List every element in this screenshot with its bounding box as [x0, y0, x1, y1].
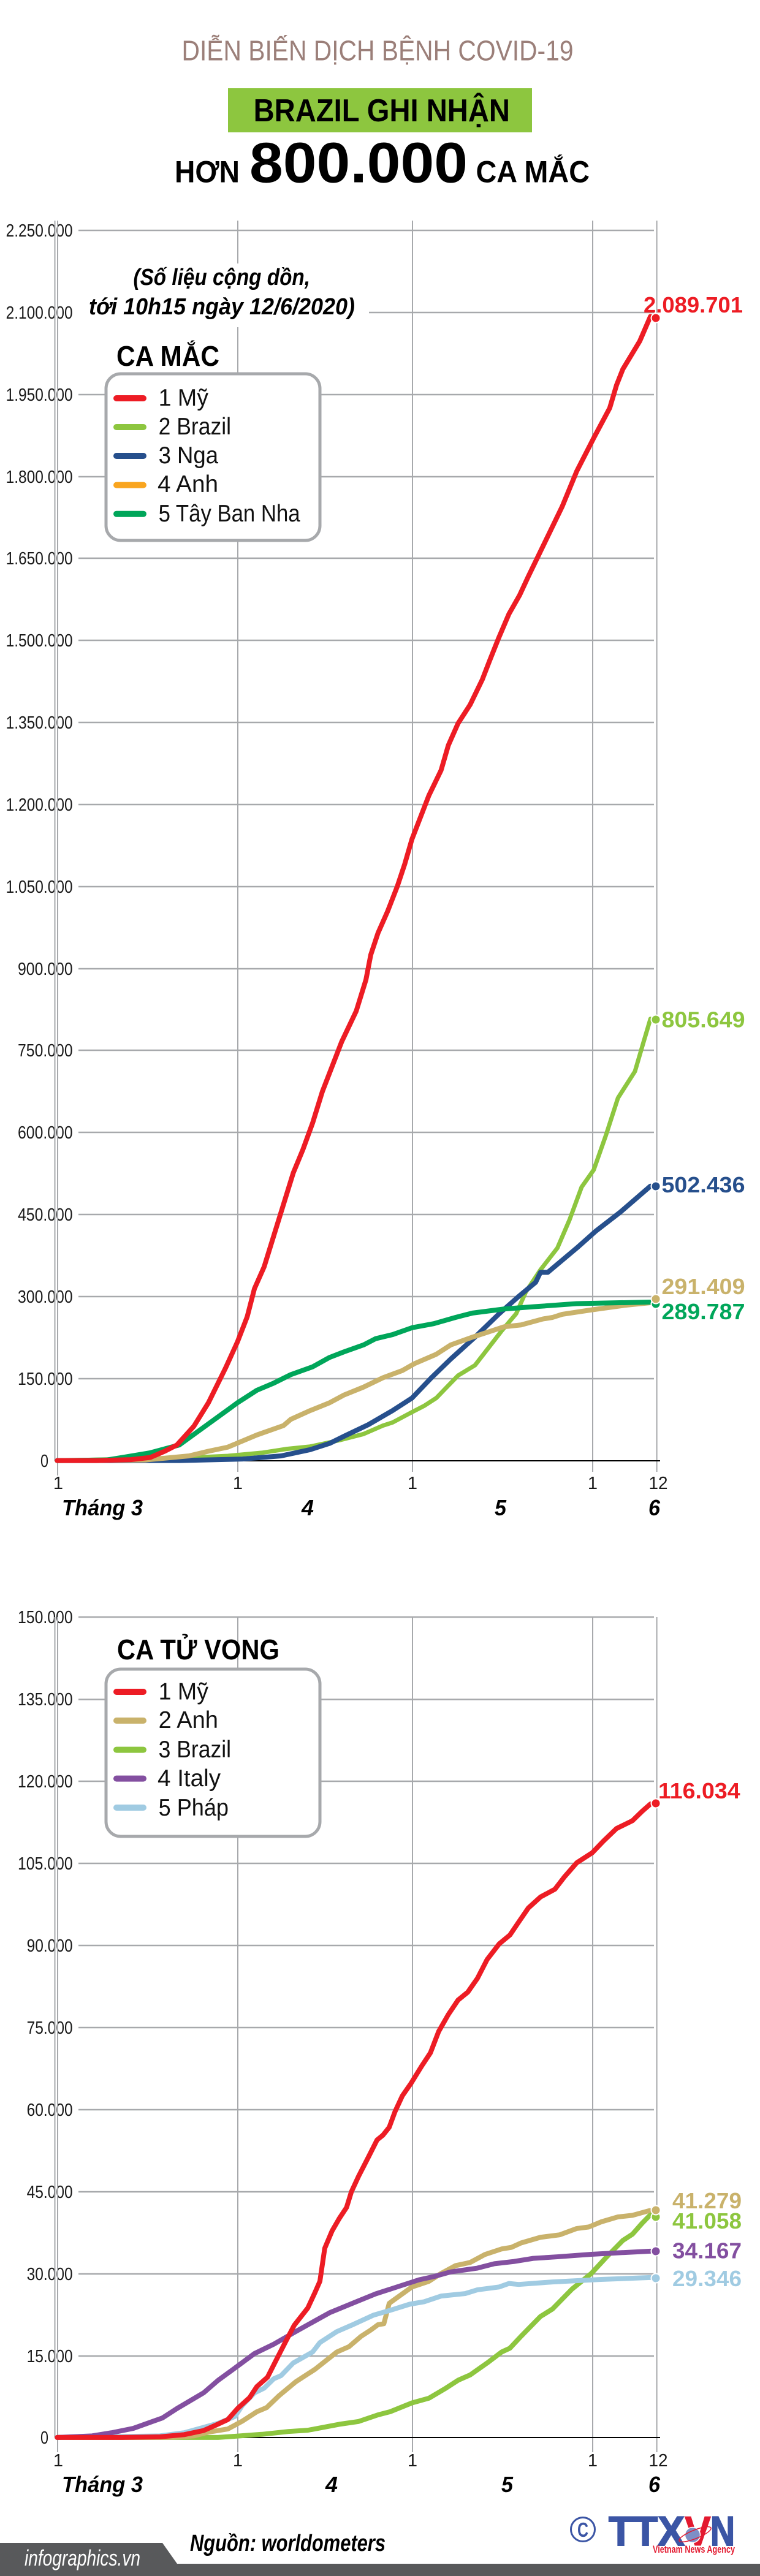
y axis labels: 1.200.000	[6, 795, 73, 815]
x axis labels: 1	[408, 2451, 417, 2471]
value labels	[644, 292, 745, 1324]
source: Nguồn: worldometers	[190, 2531, 386, 2556]
x axis labels: 5	[501, 2472, 514, 2497]
legend: ca tu vong: 4 Italy	[158, 1765, 221, 1792]
x axis labels: 1	[53, 2451, 63, 2471]
y axis labels: 1.050.000	[6, 877, 73, 897]
value labels: 29.346	[672, 2266, 742, 2291]
legend: ca mac: 3 Nga	[159, 442, 218, 469]
y axis labels: 45.000	[27, 2183, 73, 2202]
y axis labels: 300.000	[18, 1287, 73, 1307]
y axis labels: 15.000	[27, 2347, 73, 2366]
y axis labels: 0	[40, 1452, 48, 1471]
series: Nga	[57, 1186, 650, 1461]
headline figure: CA MẮC	[476, 154, 590, 189]
value labels: 2.089.701	[644, 292, 743, 317]
legend: ca mac: 2 Brazil	[159, 414, 231, 440]
y axis labels: 135.000	[18, 1690, 73, 1710]
logo: TTXVN: C	[577, 2518, 588, 2541]
value labels: 805.649	[662, 1007, 745, 1032]
x axis labels: 12	[648, 1474, 668, 1493]
x axis labels: 6	[648, 2472, 661, 2497]
series: My	[57, 316, 650, 1461]
y axis labels: 1.950.000	[6, 385, 73, 405]
series: Anh	[57, 1303, 650, 1461]
x axis labels: 6	[648, 1495, 661, 1520]
logo: TTXVN: N	[710, 2508, 735, 2555]
legend: ca mac: 4 Anh	[158, 471, 218, 498]
y axis labels: 900.000	[18, 960, 73, 979]
chart: ca tu vong	[18, 1608, 742, 2497]
value labels	[658, 1778, 742, 2291]
y axis labels: 1.650.000	[6, 549, 73, 569]
headline figure: HƠN	[175, 154, 240, 189]
value labels: 291.409	[662, 1274, 745, 1299]
y axis labels: 1.500.000	[6, 631, 73, 651]
y axis labels: 2.100.000	[6, 303, 73, 323]
legend: ca mac: 5 Tây Ban Nha	[159, 501, 300, 527]
y axis labels: 1.350.000	[6, 713, 73, 733]
note: tới 10h15 ngày 12/6/2020)	[89, 294, 355, 320]
series: Brazil deaths	[57, 2214, 650, 2438]
y axis labels: 30.000	[27, 2265, 73, 2284]
value labels: 34.167	[672, 2238, 742, 2263]
y axis labels: 90.000	[27, 1936, 73, 1956]
y axis labels: 105.000	[18, 1854, 73, 1874]
x axis labels: 1	[408, 1474, 417, 1493]
logo: TTXVN: TTX	[609, 2508, 685, 2555]
y axis labels	[18, 1608, 73, 2448]
legend: ca mac	[106, 374, 320, 540]
value labels: 289.787	[662, 1299, 745, 1324]
y axis labels: 75.000	[27, 2018, 73, 2038]
series: My deaths	[57, 1804, 650, 2438]
y axis labels: 600.000	[18, 1123, 73, 1143]
x axis labels: 1	[233, 1474, 243, 1493]
chart: ca mac	[6, 221, 745, 1520]
value labels: 116.034	[658, 1778, 740, 1803]
end dots	[651, 1799, 661, 2283]
legend: ca tu vong	[106, 1669, 320, 1836]
x axis labels	[53, 2451, 668, 2497]
footer bar: infographics.vn	[25, 2545, 140, 2570]
x axis labels: Tháng 3	[62, 1495, 143, 1520]
logo: TTXVN: V	[685, 2508, 711, 2555]
series: Tay Ban Nha	[57, 1302, 650, 1461]
note	[89, 265, 355, 320]
value labels: 502.436	[662, 1172, 745, 1197]
x axis labels: 4	[325, 2472, 338, 2497]
value labels: 41.058	[672, 2208, 742, 2233]
y axis labels: 120.000	[18, 1772, 73, 1792]
x axis labels: 12	[648, 2451, 668, 2471]
logo: TTXVN	[571, 2508, 735, 2555]
footer bar	[0, 2543, 760, 2576]
series: Brazil	[57, 1019, 650, 1461]
x axis labels: 1	[53, 1474, 63, 1493]
x axis labels: 4	[301, 1495, 314, 1520]
y axis labels: 60.000	[27, 2101, 73, 2120]
y axis labels: 150.000	[18, 1608, 73, 1627]
headline figure: 800.000	[249, 131, 468, 195]
heading: ca mac: CA MẮC	[116, 340, 219, 372]
legend: ca tu vong: 3 Brazil	[159, 1737, 231, 1763]
title: DIỄN BIẾN DỊCH BỆNH COVID-19	[181, 35, 574, 67]
headline banner: BRAZIL GHI NHẬN	[254, 93, 510, 129]
y axis labels: 750.000	[18, 1041, 73, 1061]
value labels: 41.279	[672, 2188, 742, 2213]
legend: ca tu vong: 5 Pháp	[159, 1795, 229, 1821]
y axis labels	[6, 221, 73, 1471]
x axis labels: 1	[233, 2451, 243, 2471]
x axis labels: Tháng 3	[62, 2472, 143, 2497]
series: Italy deaths	[57, 2251, 650, 2438]
y axis labels: 2.250.000	[6, 221, 73, 241]
x axis labels: 1	[588, 1474, 598, 1493]
y axis labels: 0	[40, 2428, 48, 2448]
y axis labels: 450.000	[18, 1205, 73, 1225]
y axis labels: 1.800.000	[6, 468, 73, 487]
end dots	[651, 314, 661, 1309]
heading: ca tu vong: CA TỬ VONG	[117, 1634, 279, 1665]
note: (Số liệu cộng dồn,	[134, 265, 310, 290]
series: Phap deaths	[57, 2278, 650, 2438]
x axis labels	[53, 1474, 668, 1520]
headline figure	[175, 131, 590, 195]
x axis labels: 5	[495, 1495, 507, 1520]
y axis labels: 150.000	[18, 1369, 73, 1389]
legend: ca tu vong: 1 Mỹ	[159, 1679, 208, 1705]
series: Anh deaths	[57, 2211, 650, 2438]
legend: ca tu vong: 2 Anh	[159, 1707, 218, 1733]
x axis labels: 1	[588, 2451, 598, 2471]
legend: ca mac: 1 Mỹ	[159, 385, 208, 411]
